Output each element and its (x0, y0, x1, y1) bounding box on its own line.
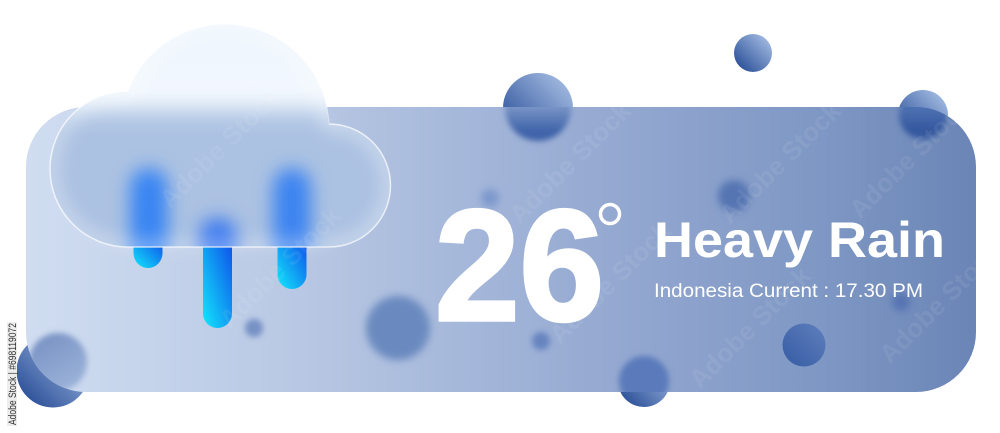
blurred spheres seen through the panel (28, 107, 950, 392)
stock watermark: Adobe Stock (683, 260, 817, 394)
rain drop: right (278, 240, 306, 289)
stock id label: Adobe Stock | #698119072 (7, 323, 19, 425)
degree symbol (600, 204, 620, 224)
stock watermark: Adobe Stock (713, 95, 847, 229)
rain drop: middle (203, 240, 232, 328)
stock watermark: Adobe Stock (503, 95, 637, 229)
stock watermark: Adobe Stock (213, 200, 347, 334)
panel: glass weather card (26, 107, 976, 392)
icon: frosted glass cloud (49, 24, 392, 248)
stock watermark (153, 80, 1000, 394)
stock watermark: Adobe Stock (153, 80, 287, 214)
rain drop: left (134, 240, 162, 268)
stock watermark: Adobe Stock (843, 90, 977, 224)
sharp sphere on the panel (782, 324, 826, 366)
stock watermark: Adobe Stock (543, 215, 677, 349)
location and time: Indonesia Current : 17.30 PM (654, 281, 923, 302)
soft white halo around the cloud (68, 98, 329, 240)
temperature value: 26 (435, 178, 604, 354)
weather condition heading: Heavy Rain (654, 212, 945, 268)
